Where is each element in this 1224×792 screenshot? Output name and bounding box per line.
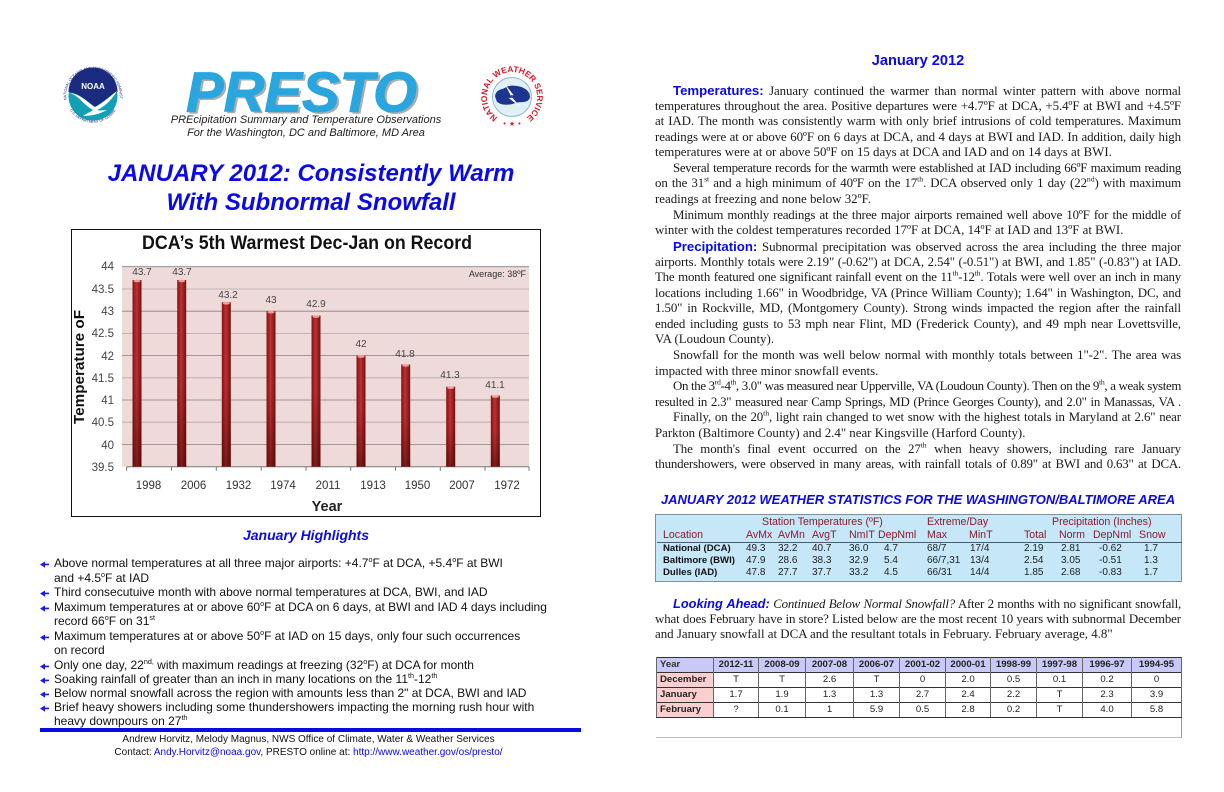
- x axis labels: [136, 480, 520, 492]
- text block: Precipitation: On the 3rd-4th, 3.0" was measured near Upperville, VA (Loudoun County). Then on the 9th, a weak system: [673, 378, 1181, 393]
- table: snowfall by year: January: [660, 689, 697, 700]
- table: weather statistics: 38.3: [812, 555, 831, 566]
- text block: Precipitation: Precipitation: Subnormal precipitation was observed across the area including the three major: [673, 239, 1181, 254]
- heading: weather statistics: JANUARY 2012 WEATHER STATISTICS FOR THE WASHINGTON/BALTIMORE AREA: [661, 492, 1175, 507]
- highlights list: Soaking rainfall of greater than an inch in many locations on the 11th-12th: [54, 671, 437, 686]
- highlights list: Above normal temperatures at all three major airports: +4.7oF at DCA, +5.4oF at BWI: [54, 555, 503, 570]
- table: weather statistics: Location: [663, 529, 703, 541]
- table: weather statistics: 14/4: [970, 567, 989, 578]
- text block: Looking Ahead: [655, 596, 1181, 641]
- table: snowfall by year: T: [1057, 689, 1062, 700]
- text block: Temperatures: readings at freezing and none below 32ºF.: [655, 192, 871, 206]
- table: snowfall by year: 0: [1154, 674, 1159, 685]
- bar chart: DCA's 5th warmest Dec-Jan: Year: [312, 499, 343, 515]
- text block: Precipitation: resulted in 2.3" measured near Camp Springs, MD (Prince Georges County), and 2.0" in Manassas, VA .: [655, 395, 1181, 409]
- table: weather statistics: NmIT: [849, 529, 875, 541]
- bar chart: DCA's 5th warmest Dec-Jan: [71, 229, 541, 517]
- text block: Precipitation: 1.50" in Rockville, MD, (Montgomery County). Strong winds impacted the region after the rainfall: [655, 301, 1181, 315]
- x axis labels: 1974: [270, 480, 296, 492]
- text block: Precipitation: thundershowers, were observed in many areas, with rainfall totals of 0.89" at BWI and 0.63" at DCA.: [655, 457, 1181, 471]
- bars: [132, 280, 500, 467]
- highlights list: Brief heavy showers including some thundershowers impacting the morning rush hour with: [54, 700, 534, 714]
- table: snowfall by year: 2.4: [961, 689, 975, 700]
- y axis labels: 43: [101, 306, 114, 318]
- table: weather statistics: National (DCA): [663, 543, 731, 554]
- table: weather statistics: 2.68: [1061, 567, 1080, 578]
- table: weather statistics: 66/31: [927, 567, 952, 578]
- table: weather statistics: 13/4: [970, 555, 989, 566]
- text block: Precipitation: Parkton (Baltimore County) and 2.4" near Kingsville (Harford County).: [655, 426, 1025, 440]
- table: weather statistics: DepNml: [1093, 529, 1131, 541]
- table: snowfall by year: Year: [660, 659, 680, 670]
- highlights list: [40, 555, 547, 728]
- table: snowfall by year: T: [1057, 704, 1062, 715]
- table: snowfall by year: 0.1: [775, 704, 789, 715]
- value labels: 41.3: [440, 370, 460, 381]
- y axis labels: 39.5: [92, 462, 114, 474]
- table: weather statistics: 47.9: [746, 555, 765, 566]
- title: [108, 160, 514, 216]
- table: weather statistics: Dulles (IAD): [663, 567, 717, 578]
- table: snowfall by year: 1: [827, 704, 832, 715]
- table: weather statistics: -0.83: [1099, 567, 1122, 578]
- x axis labels: 2011: [316, 480, 340, 492]
- table: weather statistics: DepNml: [878, 529, 916, 541]
- table: weather statistics: 1.7: [1144, 567, 1158, 578]
- icon: NOAA logo: NOAA: [81, 82, 105, 91]
- value labels: [132, 267, 505, 391]
- highlights list: Maximum temperatures at or above 60oF at DCA on 6 days, at BWI and IAD 4 days including: [54, 599, 547, 614]
- title: With Subnormal Snowfall: [166, 188, 456, 216]
- value labels: 41.8: [395, 349, 415, 360]
- table: weather statistics: -0.62: [1099, 543, 1122, 554]
- table: weather statistics: 4.5: [884, 567, 898, 578]
- table: weather statistics: Snow: [1139, 529, 1166, 541]
- x axis labels: 1950: [405, 480, 430, 492]
- subtitle: PREcipitation Summary and Temperature Observations: [171, 114, 441, 126]
- table: snowfall by year: 1994-95: [1139, 659, 1174, 670]
- table: weather statistics: 40.7: [812, 543, 831, 554]
- table: weather statistics: 3.05: [1061, 555, 1080, 566]
- y axis labels: 44: [101, 261, 115, 273]
- table: snowfall by year: February: [660, 704, 701, 715]
- highlights list: heavy downpours on 27th: [54, 713, 187, 728]
- text block: Precipitation: VA (Loudoun County).: [655, 332, 774, 346]
- table: snowfall by year: 0.5: [1007, 674, 1020, 685]
- text block: Temperatures: Minimum monthly readings at the three major airports remained well above 10ºF for the middle of: [673, 208, 1181, 222]
- text block: Precipitation: ended including gusts to 53 mph near Flint, MD (Frederick County), and 49 mph near Lovettsville,: [655, 317, 1181, 331]
- x axis labels: 2006: [181, 480, 206, 492]
- table: weather statistics: 1.85: [1024, 567, 1043, 578]
- value labels: 43: [265, 295, 277, 306]
- text block: Precipitation: The month featured one significant rainfall event on the 11th-12th. Totals were well over an inch in many: [655, 269, 1181, 284]
- table: weather statistics: -0.51: [1099, 555, 1122, 566]
- table: weather statistics: 37.7: [812, 567, 831, 578]
- text block: Temperatures: at IAD. The month was consistently warm with only brief intrusions of cold temperatures. Maximum: [655, 114, 1181, 128]
- table: snowfall by year: 0.1: [1053, 674, 1066, 685]
- text block: Precipitation: locations including 1.66" in Woodbridge, VA (Prince William County); 1.64" in Washington, DC, and: [655, 286, 1181, 300]
- table: weather statistics: Norm: [1059, 529, 1085, 541]
- text block: Temperatures: Several temperature records for the warmth were established at IAD including 66ºF maximum reading: [673, 161, 1181, 175]
- bar chart: DCA's 5th warmest Dec-Jan: DCA’s 5th Warmest Dec-Jan on Record: [142, 233, 472, 254]
- table: weather statistics: 68/7: [927, 543, 946, 554]
- icon: National Weather Service logo: • ★ •: [503, 120, 521, 128]
- value labels: 43.7: [172, 267, 192, 278]
- y axis labels: 41: [101, 395, 114, 407]
- table: snowfall by year: 2012-11: [719, 659, 753, 670]
- table: weather statistics: AvgT: [812, 529, 837, 541]
- table: snowfall by year: ?: [733, 704, 739, 715]
- footer credits: Andrew Horvitz, Melody Magnus, NWS Office of Climate, Water & Weather Services: [122, 734, 495, 745]
- table: snowfall by year: 1.3: [823, 689, 836, 700]
- y axis labels: 40: [101, 440, 114, 452]
- table: snowfall by year: 3.9: [1150, 689, 1163, 700]
- table: weather statistics: Total: [1024, 529, 1046, 541]
- table: snowfall by year: 1998-99: [996, 659, 1031, 670]
- table: snowfall by year: 1996-97: [1089, 659, 1125, 670]
- text block: Precipitation: The month's final event occurred on the 27th when heavy showers, including rare January: [673, 440, 1181, 456]
- table: weather statistics: 33.2: [849, 567, 868, 578]
- table: snowfall by year: T: [733, 674, 739, 685]
- table: weather statistics: 2.54: [1024, 555, 1043, 566]
- table: weather statistics: [655, 514, 1182, 582]
- table: weather statistics: 32.9: [849, 555, 868, 566]
- text block: Temperatures: on the 31st and a high minimum of 40ºF on the 17th. DCA observed only 1 day (22nd) with maximum: [655, 175, 1181, 190]
- table: weather statistics: Baltimore (BWI): [663, 555, 735, 566]
- table: snowfall by year: December: [660, 674, 706, 685]
- value labels: 42: [355, 339, 367, 350]
- table: snowfall by year: 2007-08: [812, 659, 847, 670]
- table: snowfall by year: 4.0: [1100, 704, 1114, 715]
- x axis labels: 2007: [449, 480, 475, 492]
- table: weather statistics: MinT: [969, 529, 993, 541]
- table: weather statistics: 28.6: [778, 555, 797, 566]
- table: weather statistics: Station Temperatures (ºF): [762, 516, 883, 528]
- blue rule: [40, 728, 581, 732]
- y axis labels: 42.5: [92, 328, 114, 340]
- value labels: 43.2: [218, 290, 238, 301]
- table: snowfall by year: 1.9: [775, 689, 789, 700]
- heading: January Highlights: January Highlights: [243, 527, 369, 543]
- bar chart: DCA's 5th warmest Dec-Jan: Temperature oF: [71, 310, 88, 424]
- table: snowfall by year: 2.0: [961, 674, 975, 685]
- x axis labels: 1998: [136, 480, 161, 492]
- highlights list: Only one day, 22nd, with maximum readings at freezing (32oF) at DCA for month: [54, 657, 474, 672]
- table: snowfall by year: 2006-07: [859, 659, 894, 670]
- table: weather statistics: 4.7: [884, 543, 898, 554]
- footer credits: [114, 734, 503, 758]
- title: JANUARY 2012: Consistently Warm: [108, 160, 514, 187]
- heading: January 2012: January 2012: [872, 53, 964, 69]
- value labels: 42.9: [306, 299, 326, 310]
- text block: Looking Ahead: Looking Ahead: Continued Below Normal Snowfall? After 2 months with no significant snowfall,: [673, 596, 1181, 611]
- table: weather statistics: AvMn: [778, 529, 805, 541]
- table: weather statistics: 49.3: [746, 543, 765, 554]
- text block: Temperatures: Temperatures: January continued the warmer than normal winter pattern with above normal: [673, 83, 1181, 98]
- text block: Precipitation: Snowfall for the month was well below normal with monthly totals between 1"-2". The area was: [673, 348, 1181, 362]
- highlights list: record 66oF on 31st: [54, 613, 155, 628]
- table: snowfall by year: T: [874, 674, 879, 685]
- table: weather statistics: 1.7: [1144, 543, 1158, 554]
- value labels: 41.1: [485, 380, 505, 391]
- bar chart: DCA's 5th warmest Dec-Jan: Average: 38ºF: [469, 269, 527, 279]
- table: snowfall by year: 5.8: [1150, 704, 1163, 715]
- x axis labels: 1932: [226, 480, 251, 492]
- subtitle: For the Washington, DC and Baltimore, MD Area: [187, 127, 425, 139]
- icon: National Weather Service logo: NATIONAL WEATHER SERVICE: [481, 66, 543, 122]
- y axis labels: [92, 261, 115, 474]
- highlights list: Third consecutuive month with above normal temperatures at DCA, BWI, and IAD: [54, 585, 488, 599]
- table: weather statistics: Precipitation (Inches): [1052, 516, 1152, 528]
- highlights list: on record: [54, 643, 105, 657]
- text block: Precipitation: airports. Monthly totals were 2.19" (-0.62") at DCA, 2.54" (-0.51") at BWI, and 1.85" (-0.83") at IAD.: [655, 255, 1181, 269]
- table: snowfall by year: 2.8: [961, 704, 975, 715]
- table: weather statistics: 27.7: [778, 567, 797, 578]
- table: weather statistics: 36.0: [849, 543, 868, 554]
- table: snowfall by year: 1.3: [870, 689, 883, 700]
- text block: Temperatures: temperatures were at or above 50ºF on 15 days at DCA and IAD and on 14 days at BWI.: [655, 145, 1112, 159]
- x axis labels: 1972: [494, 480, 520, 492]
- y axis labels: 41.5: [92, 373, 114, 385]
- table: snowfall by year: 5.9: [870, 704, 883, 715]
- table: snowfall by year: 1.7: [729, 689, 743, 700]
- text block: Temperatures: winter with the coldest temperatures recorded 17ºF at DCA, 14ºF at IAD and 13ºF at BWI.: [655, 223, 1123, 237]
- text block: Temperatures: [655, 83, 1182, 237]
- y axis labels: 43.5: [92, 284, 114, 296]
- text block: Precipitation: [655, 239, 1182, 471]
- table: weather statistics: 1.3: [1144, 555, 1158, 566]
- table: snowfall by year: 2.7: [916, 689, 929, 700]
- text block: Temperatures: temperatures throughout the area. Positive departures were +4.7ºF at DCA, +5.4ºF at BWI and +4.5ºF: [655, 99, 1181, 113]
- text block: Looking Ahead: what does February have in store? Listed below are the most recent 10 years with subnormal December: [655, 612, 1181, 626]
- table: snowfall by year: [656, 657, 1182, 738]
- table: snowfall by year: 2008-09: [764, 659, 800, 670]
- table: snowfall by year: 0.2: [1007, 704, 1020, 715]
- y axis labels: 40.5: [92, 417, 114, 429]
- text block: Looking Ahead: and January snowfall at DCA and the resultant totals in February. February average, 4.8": [655, 627, 1113, 641]
- table: weather statistics: 32.2: [778, 543, 797, 554]
- text block: Temperatures: readings were at or above 60ºF on 6 days at DCA, and 4 days at BWI and IAD. In addition, daily high: [655, 130, 1181, 144]
- text block: Precipitation: impacted with three minor snowfall events.: [655, 364, 878, 378]
- table: snowfall by year: 1997-98: [1042, 659, 1077, 670]
- table: snowfall by year: 0.5: [916, 704, 929, 715]
- table: snowfall by year: 2.3: [1100, 689, 1114, 700]
- table: snowfall by year: 0.2: [1100, 674, 1114, 685]
- table: weather statistics: 5.4: [884, 555, 898, 566]
- table: snowfall by year: 2001-02: [905, 659, 940, 670]
- table: snowfall by year: 2.6: [823, 674, 836, 685]
- table: weather statistics: AvMx: [746, 529, 772, 541]
- table: weather statistics: 17/4: [970, 543, 989, 554]
- table: weather statistics: Max: [927, 529, 947, 541]
- y axis labels: 42: [101, 351, 114, 363]
- table: weather statistics: Extreme/Day: [927, 516, 988, 528]
- table: weather statistics: 2.81: [1061, 543, 1080, 554]
- table: snowfall by year: T: [779, 674, 785, 685]
- footer credits: Contact: Andy.Horvitz@noaa.gov, PRESTO online at: http://www.weather.gov/os/presto/: [114, 747, 503, 758]
- table: snowfall by year: 0: [920, 674, 925, 685]
- subtitle: [171, 114, 441, 139]
- highlights list: Maximum temperatures at or above 50oF at IAD on 15 days, only four such occurrences: [54, 628, 520, 643]
- text block: Precipitation: Finally, on the 20th, light rain changed to wet snow with the highest totals in Maryland at 2.6" near: [673, 409, 1181, 424]
- x axis labels: 1913: [360, 480, 386, 492]
- table: weather statistics: 2.19: [1024, 543, 1043, 554]
- table: weather statistics: 66/7,31: [927, 555, 960, 566]
- table: weather statistics: 47.8: [746, 567, 765, 578]
- highlights list: Below normal snowfall across the region with amounts less than 2" at DCA, BWI and IAD: [54, 686, 526, 700]
- value labels: 43.7: [132, 267, 152, 278]
- table: snowfall by year: 2.2: [1007, 689, 1020, 700]
- table: snowfall by year: 2000-01: [950, 659, 986, 670]
- highlights list: and +4.5oF at IAD: [54, 570, 149, 585]
